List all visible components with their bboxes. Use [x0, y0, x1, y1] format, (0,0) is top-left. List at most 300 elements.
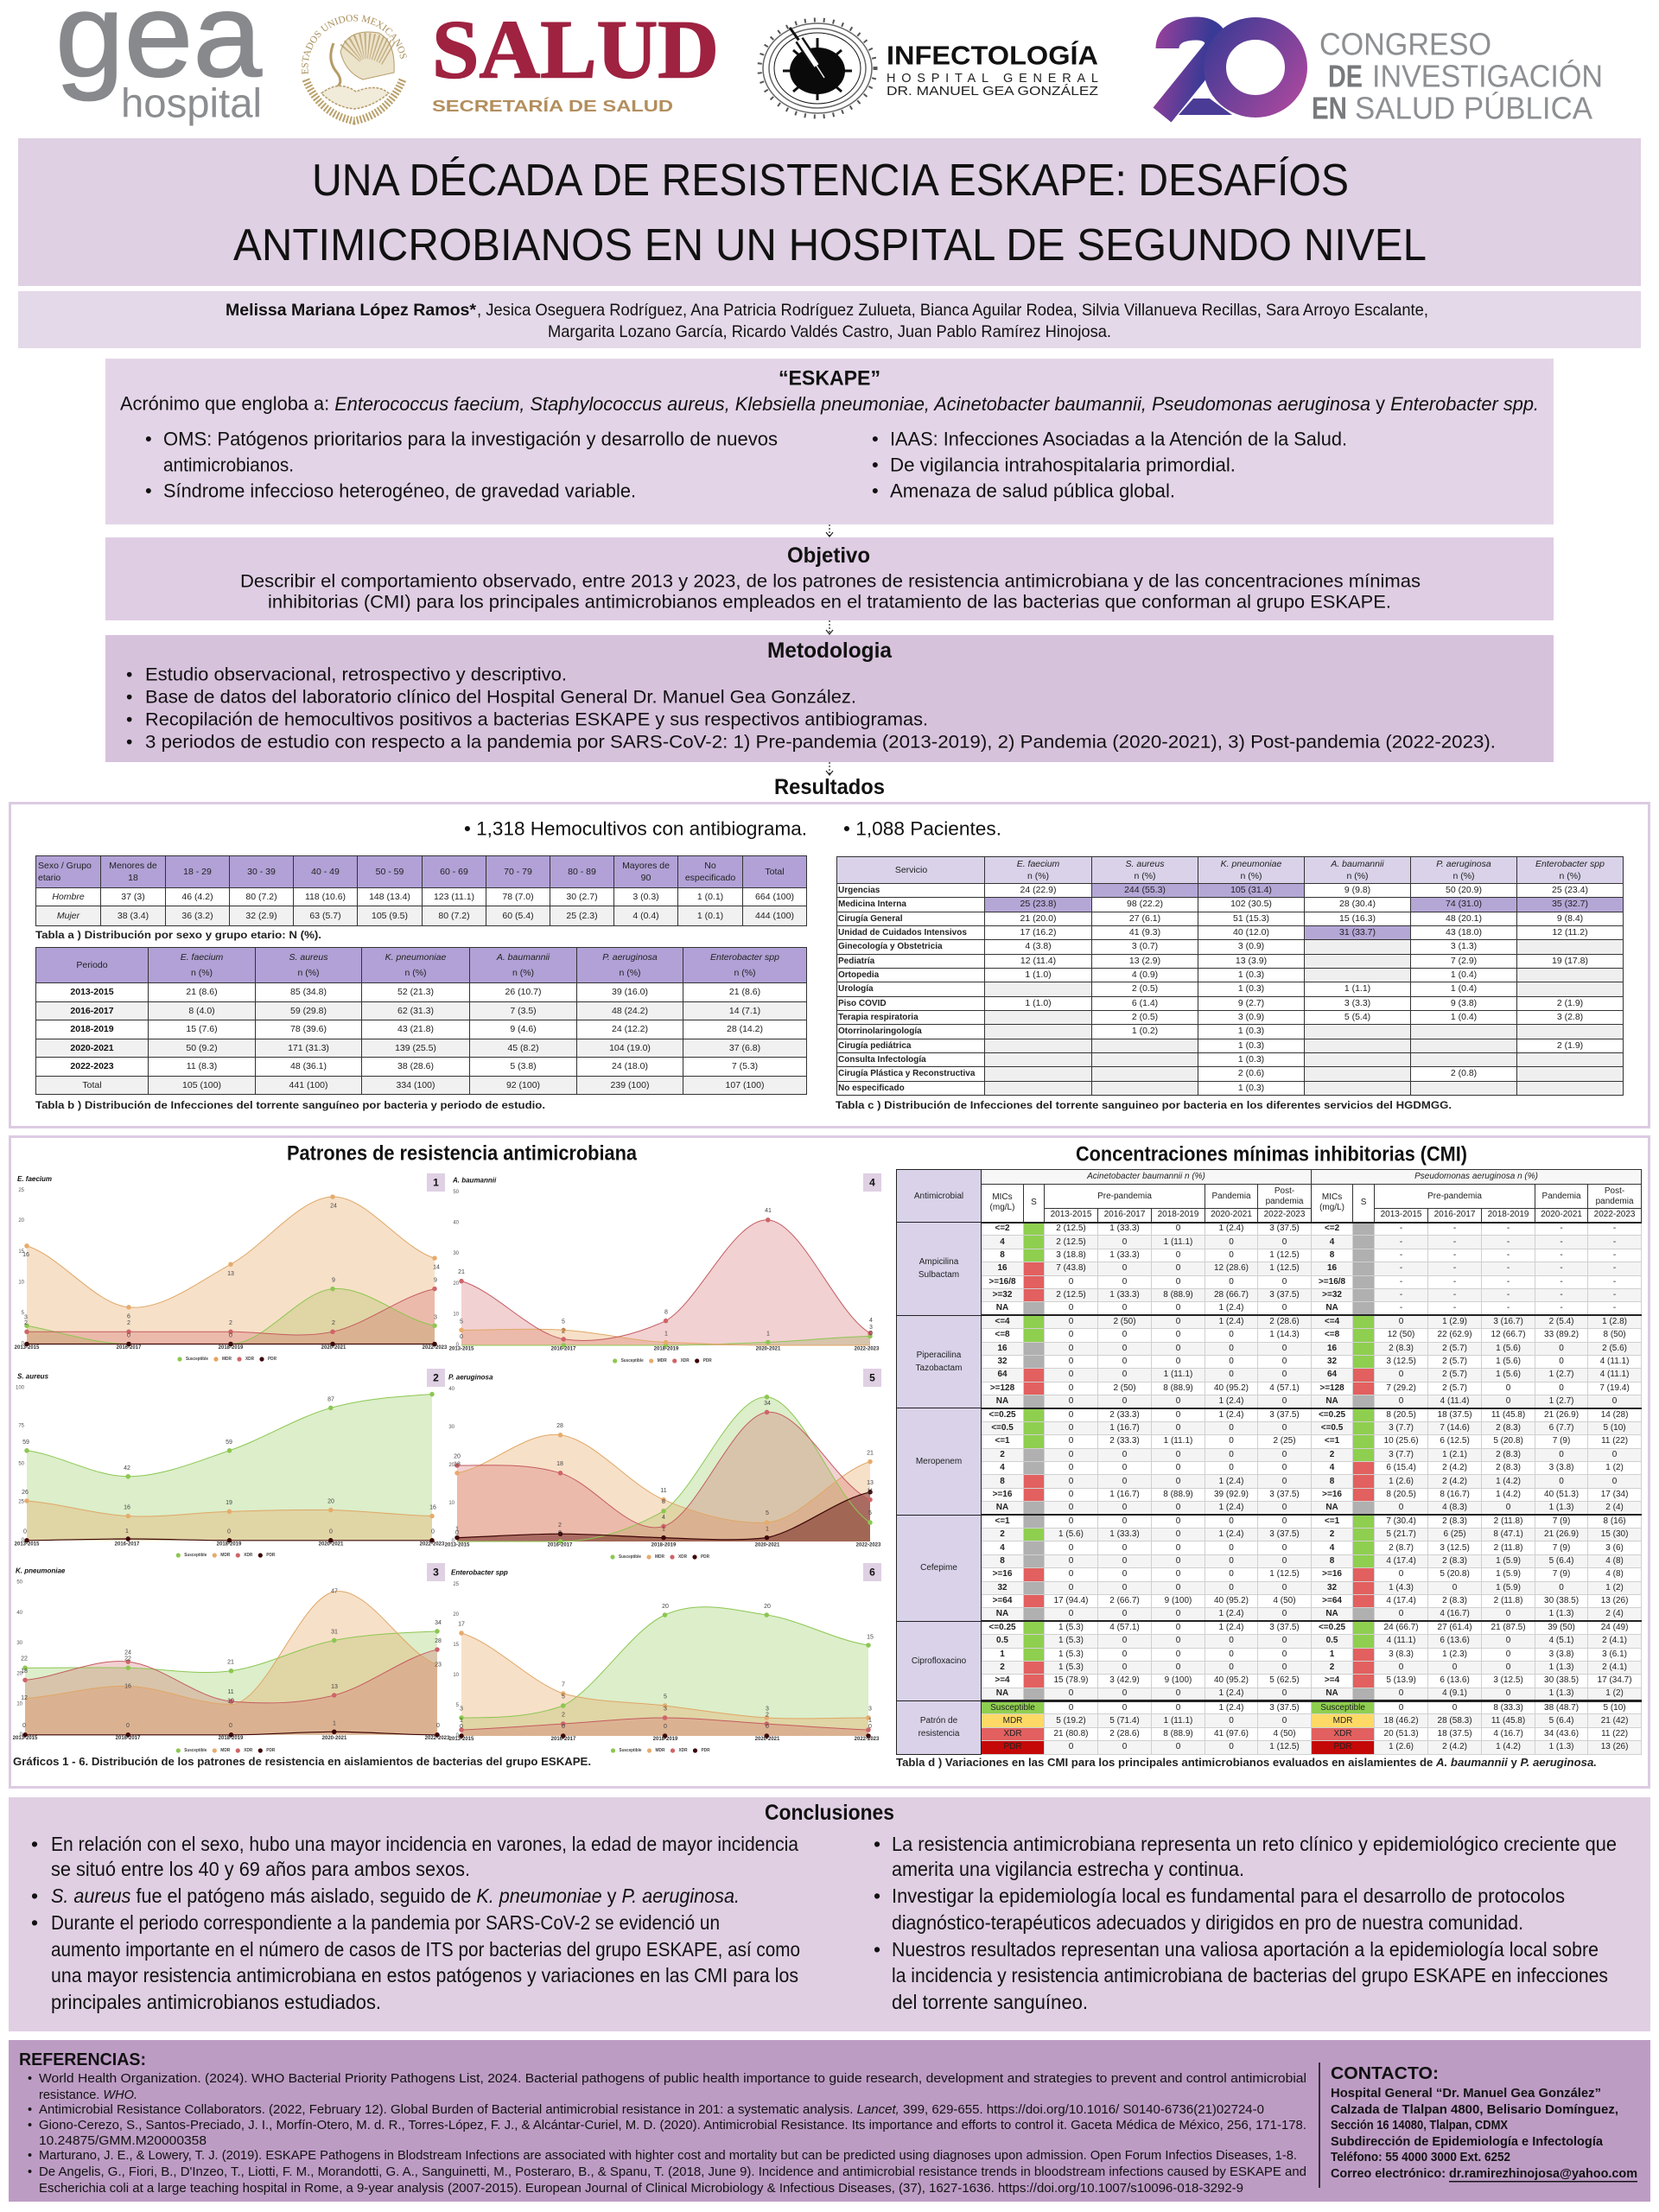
table d: concentraciones mínimas inhibitorias: - — [1613, 1237, 1616, 1247]
chart 2: S. aureus: XDR — [244, 1553, 252, 1558]
chart 3: K. pneumoniae — [13, 1563, 450, 1753]
table d: concentraciones mínimas inhibitorias: 2 (66.7) — [1109, 1596, 1140, 1605]
table d: concentraciones mínimas inhibitorias: 0 — [1282, 1450, 1287, 1459]
logo: escudo nacional: ESTADOS UNIDOS MEXICANOS — [301, 14, 407, 74]
logo: infectología — [760, 20, 1098, 117]
table d: concentraciones mínimas inhibitorias: 0 — [1176, 1662, 1180, 1672]
table d: concentraciones mínimas inhibitorias: 28 (66.7) — [1214, 1290, 1249, 1300]
table d: concentraciones mínimas inhibitorias: 0 — [1506, 1383, 1510, 1393]
table d: concentraciones mínimas inhibitorias: 3 (8.3) — [1389, 1649, 1414, 1659]
table d: concentraciones mínimas inhibitorias: 0 — [1176, 1636, 1180, 1645]
chart 1: E. faecium: 15 — [18, 1249, 25, 1255]
table d: concentraciones mínimas inhibitorias: Meropenem — [916, 1457, 962, 1466]
table d: concentraciones mínimas inhibitorias: 7 (30.4) — [1386, 1516, 1416, 1526]
table d: concentraciones mínimas inhibitorias: 0 — [1229, 1569, 1234, 1579]
chart 3: K. pneumoniae: PDR — [266, 1748, 275, 1753]
table d: concentraciones mínimas inhibitorias: 1 (2.4) — [1219, 1503, 1243, 1512]
table d: concentraciones mínimas inhibitorias: 0 — [1069, 1556, 1073, 1566]
table a: sexo y grupo etario: 1 (0.1) — [697, 892, 723, 902]
table d: concentraciones mínimas inhibitorias: 0 — [1282, 1516, 1287, 1526]
panel: Referencias: • — [28, 2149, 32, 2163]
table d: concentraciones mínimas inhibitorias: 2 — [1000, 1662, 1005, 1672]
table c: servicios: 19 (17.8) — [1552, 956, 1588, 966]
table d: concentraciones mínimas inhibitorias: 2 (33.3) — [1109, 1436, 1140, 1446]
table d: concentraciones mínimas inhibitorias: 0 — [1282, 1344, 1287, 1353]
table d: concentraciones mínimas inhibitorias: - — [1507, 1290, 1510, 1300]
table c: servicios: n (%) — [1559, 871, 1581, 881]
chart 1: E. faecium: 3 — [24, 1314, 28, 1320]
table a: sexo y grupo etario: 50 - 59 — [376, 866, 404, 876]
table c: servicios: 3 (0.9) — [1238, 941, 1264, 951]
chart 2: S. aureus: 2018-2019 — [217, 1541, 242, 1547]
chart 4: A. baumannii: Susceptible — [621, 1358, 644, 1363]
table c: servicios: 1 (1.1) — [1344, 983, 1370, 994]
chart 6: Enterobacter spp: 1 — [460, 1718, 463, 1724]
table d: concentraciones mínimas inhibitorias: - — [1507, 1277, 1510, 1287]
chart 5: P. aeruginosa: 30 — [448, 1425, 455, 1430]
table d: concentraciones mínimas inhibitorias: 0 — [1229, 1450, 1234, 1459]
chart 3: K. pneumoniae: 18 — [21, 1669, 28, 1675]
chart 2: S. aureus: 16 — [124, 1505, 130, 1511]
table d: concentraciones mínimas inhibitorias: pandemia — [1596, 1196, 1634, 1206]
chart 3: K. pneumoniae: 24 — [124, 1650, 131, 1656]
chart 3: K. pneumoniae: 47 — [331, 1588, 338, 1595]
table d: concentraciones mínimas inhibitorias: 1 (2.4) — [1219, 1688, 1243, 1698]
table d: concentraciones mínimas inhibitorias: 0 — [1559, 1383, 1564, 1393]
contacto: dr.ramirezhinojosa@yahoo.com — [1449, 2167, 1637, 2181]
table d: concentraciones mínimas inhibitorias: 0 — [1506, 1662, 1510, 1672]
table d: concentraciones mínimas inhibitorias: - — [1453, 1277, 1456, 1287]
chart 1: E. faecium: PDR — [268, 1357, 276, 1362]
panel: Objetivo: Describir el comportamiento observado, entre 2013 y 2023, de los patrones de resistencia antimicrobiana y de las concentraciones mínimas — [240, 572, 1421, 591]
panel: Referencias: De Angelis, G., Fiori, B., D'Inzeo, T., Liotti, F. M., Morandotti, G. A., Sanguinetti, M., Posteraro, B., & Spanu, T. (2018, June 9). Incidence and antimicrobial resistance trends in bloodstream infections caused by ESKAPE and — [39, 2165, 1306, 2179]
chart 3: K. pneumoniae: 40 — [16, 1611, 23, 1616]
panel: Conclusiones: S. aureus fue el patógeno más aislado, seguido de K. pneumoniae y P. aeruginosa. — [51, 1885, 740, 1907]
table d: concentraciones mínimas inhibitorias: 0 — [1122, 1357, 1127, 1366]
panel: Metodología: Base de datos del laboratorio clínico del Hospital General Dr. Manuel Gea González. — [145, 688, 856, 707]
table d: concentraciones mínimas inhibitorias: - — [1560, 1290, 1563, 1300]
table c: servicios: 13 (3.9) — [1236, 956, 1267, 966]
table d: concentraciones mínimas inhibitorias: 39 (50) — [1548, 1623, 1575, 1632]
chart 2: S. aureus: 42 — [124, 1465, 130, 1471]
table b: bacteria y periodo: 52 (21.3) — [397, 987, 434, 997]
table d: concentraciones mínimas inhibitorias: 5 (6.4) — [1549, 1556, 1574, 1566]
table d: concentraciones mínimas inhibitorias: Acinetobacter baumannii n (%) — [1087, 1172, 1205, 1181]
stat: pacientes: • 1,088 Pacientes. — [843, 817, 1001, 840]
panel: Referencias: Marturano, J. E., & Lowery, T. J. (2019). ESKAPE Pathogens in Blodstream Infections are associated with highter cost and mortality but can be predicted using diagnoses upon admission. Open Forum Infectios Diseases, 1-8. — [39, 2149, 1297, 2163]
chart 1: E. faecium: 25 — [18, 1188, 25, 1193]
table d: concentraciones mínimas inhibitorias: 1 (5.9) — [1496, 1569, 1521, 1579]
table d: concentraciones mínimas inhibitorias: 3 (37.5) — [1269, 1410, 1300, 1420]
table d: concentraciones mínimas inhibitorias: - — [1613, 1290, 1616, 1300]
chart 2: S. aureus: 2013-2015 — [15, 1541, 40, 1547]
chart 2: S. aureus: 87 — [327, 1396, 334, 1402]
table d: concentraciones mínimas inhibitorias: 0 — [1176, 1556, 1180, 1566]
table d: concentraciones mínimas inhibitorias: 1 (33.3) — [1109, 1250, 1140, 1260]
table b: bacteria y periodo: n (%) — [512, 968, 534, 978]
contacto: Teléfono: 55 4000 3000 Ext. 6252 — [1331, 2151, 1510, 2164]
table d: concentraciones mínimas inhibitorias: Pandemia — [1542, 1191, 1581, 1201]
table d: concentraciones mínimas inhibitorias: >=128 — [1319, 1383, 1344, 1393]
table d: concentraciones mínimas inhibitorias: Pre-pandemia — [1097, 1191, 1152, 1201]
table b: bacteria y periodo: 37 (6.8) — [729, 1043, 760, 1053]
table d: concentraciones mínimas inhibitorias: 2 (4) — [1605, 1609, 1624, 1618]
table d: concentraciones mínimas inhibitorias: 4 (5.1) — [1549, 1636, 1574, 1645]
chart 2: S. aureus: 0 — [23, 1529, 27, 1535]
table d: concentraciones mínimas inhibitorias: 1 (2.4) — [1219, 1317, 1243, 1326]
table d: concentraciones mínimas inhibitorias: 4 (50) — [1273, 1729, 1296, 1738]
table d: concentraciones mínimas inhibitorias: 5 (20.8) — [1440, 1569, 1470, 1579]
table d: concentraciones mínimas inhibitorias: 0 — [1122, 1583, 1127, 1592]
chart 5: P. aeruginosa: 2022-2023 — [856, 1542, 881, 1548]
table d: concentraciones mínimas inhibitorias: 5 (10) — [1604, 1703, 1626, 1713]
panel: Objetivo: Objetivo — [787, 543, 870, 568]
table d: concentraciones mínimas inhibitorias: 0 — [1452, 1662, 1457, 1672]
table d: concentraciones mínimas inhibitorias: - — [1560, 1303, 1563, 1313]
table d: concentraciones mínimas inhibitorias: - — [1613, 1263, 1616, 1273]
table d: concentraciones mínimas inhibitorias: 21 (26.9) — [1544, 1410, 1579, 1420]
table d: concentraciones mínimas inhibitorias: 8 — [1330, 1477, 1334, 1486]
table d: concentraciones mínimas inhibitorias: 0 — [1229, 1556, 1234, 1566]
table a: sexo y grupo etario: 46 (4.2) — [181, 892, 213, 902]
table d: concentraciones mínimas inhibitorias: 0 — [1399, 1569, 1403, 1579]
table d: concentraciones mínimas inhibitorias: 2 (12.5) — [1056, 1224, 1086, 1233]
chart 6: Enterobacter spp: 6 — [869, 1566, 875, 1578]
chart 6: Enterobacter spp: Enterobacter spp — [451, 1569, 508, 1576]
chart 4: A. baumannii: PDR — [703, 1358, 712, 1363]
table d: concentraciones mínimas inhibitorias: 0 — [1176, 1303, 1180, 1313]
chart 3: K. pneumoniae: 2016-2017 — [116, 1736, 141, 1741]
table d: concentraciones mínimas inhibitorias: 1 (11.1) — [1164, 1237, 1192, 1247]
table d: concentraciones mínimas inhibitorias: 0 — [1122, 1703, 1127, 1713]
chart 5: P. aeruginosa: 4 — [662, 1515, 665, 1521]
table d: concentraciones mínimas inhibitorias: 0 — [1229, 1583, 1234, 1592]
chart 4: A. baumannii: 40 — [453, 1220, 460, 1225]
table d: concentraciones mínimas inhibitorias: 15 (30) — [1601, 1529, 1628, 1539]
table d: concentraciones mínimas inhibitorias: 4 (17.4) — [1386, 1556, 1416, 1566]
table d: concentraciones mínimas inhibitorias: 2 (25) — [1273, 1436, 1296, 1446]
table d: concentraciones mínimas inhibitorias: 0 — [1559, 1357, 1564, 1366]
chart 1: E. faecium: 5 — [22, 1311, 25, 1316]
table d: concentraciones mínimas inhibitorias: - — [1613, 1224, 1616, 1233]
table d: concentraciones mínimas inhibitorias: 4 — [1330, 1463, 1334, 1472]
table d: concentraciones mínimas inhibitorias: 1 (2.1) — [1442, 1450, 1467, 1459]
table d: concentraciones mínimas inhibitorias: 1 (14.3) — [1269, 1330, 1300, 1339]
table c: servicios: 1 (1.0) — [1025, 969, 1052, 980]
table d: concentraciones mínimas inhibitorias: 1 (5.3) — [1058, 1662, 1084, 1672]
chart 5: P. aeruginosa: 0 — [558, 1530, 562, 1536]
table d: concentraciones mínimas inhibitorias: <=1 — [995, 1516, 1010, 1526]
table b: bacteria y periodo: Enterobacter spp — [710, 952, 779, 963]
table c: servicios: 1 (0.4) — [1451, 1012, 1477, 1022]
table d: concentraciones mínimas inhibitorias: 0 — [1282, 1396, 1287, 1406]
table b: bacteria y periodo: 26 (10.7) — [505, 987, 542, 997]
chart 5: P. aeruginosa: 40 — [448, 1387, 455, 1392]
table d: concentraciones mínimas inhibitorias: 0 — [1176, 1477, 1180, 1486]
table d: concentraciones mínimas inhibitorias: >=32 — [993, 1290, 1012, 1300]
table d: concentraciones mínimas inhibitorias: 3 (7.7) — [1389, 1423, 1414, 1433]
table c: servicios: 43 (18.0) — [1446, 927, 1482, 938]
table b: bacteria y periodo: P. aeruginosa — [602, 952, 658, 963]
table d: concentraciones mínimas inhibitorias: (mg/L) — [990, 1203, 1014, 1212]
panel: Conclusiones: del torrente sanguíneo. — [892, 1991, 1088, 2013]
table d: concentraciones mínimas inhibitorias: 0 — [1282, 1583, 1287, 1592]
chart 5: P. aeruginosa: 10 — [448, 1501, 455, 1506]
chart 6: Enterobacter spp: 0 — [868, 1724, 872, 1730]
heading: Resultados: Resultados — [774, 775, 885, 799]
table d: concentraciones mínimas inhibitorias: 0 — [1069, 1477, 1073, 1486]
table d: concentraciones mínimas inhibitorias: 0 — [1069, 1344, 1073, 1353]
table c: servicios: Unidad de Cuidados Intensivos — [838, 928, 967, 938]
panel: ESKAPE: • — [872, 454, 879, 475]
table d: concentraciones mínimas inhibitorias: 0 — [1122, 1330, 1127, 1339]
table d: concentraciones mínimas inhibitorias: 5 (13.9) — [1386, 1675, 1416, 1685]
panel: Metodología: • — [126, 665, 132, 684]
table d: concentraciones mínimas inhibitorias: 2 (50) — [1113, 1317, 1136, 1326]
chart 5: P. aeruginosa: 20 — [454, 1453, 461, 1460]
table d: concentraciones mínimas inhibitorias: 1 — [1000, 1649, 1005, 1659]
table d: concentraciones mínimas inhibitorias: 0 — [1506, 1688, 1510, 1698]
chart 3: K. pneumoniae: 2018-2019 — [219, 1736, 244, 1741]
table d: concentraciones mínimas inhibitorias: 0 — [1399, 1370, 1403, 1379]
chart 1: E. faecium: 0 — [229, 1332, 232, 1338]
chart 2: S. aureus: 1 — [125, 1529, 129, 1535]
table c: servicios: 9 (3.8) — [1451, 998, 1477, 1008]
table b: bacteria y periodo: 50 (9.2) — [186, 1043, 218, 1053]
table a: sexo y grupo etario: 37 (3) — [121, 892, 145, 902]
table c: servicios: 105 (31.4) — [1230, 885, 1272, 895]
panel: Metodología: Recopilación de hemocultivos positivos a bacterias ESKAPE y sus respectivos antibiogramas. — [145, 710, 928, 729]
table d: concentraciones mínimas inhibitorias: 21 (80.8) — [1053, 1729, 1089, 1738]
table d: concentraciones mínimas inhibitorias: 0 — [1282, 1503, 1287, 1512]
table d: concentraciones mínimas inhibitorias: 2 (8.3) — [1442, 1596, 1467, 1605]
panel: Referencias — [9, 2040, 1650, 2202]
table d: concentraciones mínimas inhibitorias: 2 (4.1) — [1602, 1636, 1627, 1645]
table d: concentraciones mínimas inhibitorias: >=16 — [993, 1490, 1012, 1499]
table a: sexo y grupo etario: 4 (0.4) — [632, 911, 659, 921]
caption: tabla a: Tabla a ) Distribución por sexo y grupo etario: N (%). — [35, 929, 321, 941]
panel: Conclusiones: se situó entre los 40 y 69 años para ambos sexos. — [51, 1858, 470, 1880]
panel: Conclusiones: • — [31, 1885, 38, 1907]
table d: concentraciones mínimas inhibitorias: 21 (42) — [1601, 1716, 1628, 1726]
table d: concentraciones mínimas inhibitorias: Post- — [1605, 1185, 1624, 1196]
table d: concentraciones mínimas inhibitorias: 1 (12.5) — [1269, 1742, 1300, 1751]
table d: concentraciones mínimas inhibitorias: 64 — [1327, 1370, 1337, 1379]
panel: Metodología: • — [126, 733, 132, 752]
table d: concentraciones mínimas inhibitorias: Patrón de — [920, 1716, 957, 1726]
contacto: Sección 16 14080, Tlalpan, CDMX — [1331, 2119, 1508, 2133]
table d: concentraciones mínimas inhibitorias: 0 — [1282, 1688, 1287, 1698]
table d: concentraciones mínimas inhibitorias: - — [1453, 1303, 1456, 1313]
chart 2: S. aureus: 25 — [18, 1500, 25, 1505]
panel: Conclusiones: La resistencia antimicrobiana representa un reto clínico y epidemiológico creciente que — [892, 1833, 1617, 1855]
chart 3: K. pneumoniae: 3 — [433, 1566, 439, 1578]
panel: Conclusiones: Conclusiones — [765, 1801, 894, 1825]
chart 3: K. pneumoniae: 12 — [21, 1695, 28, 1701]
table d: concentraciones mínimas inhibitorias: 0 — [1122, 1636, 1127, 1645]
table d: concentraciones mínimas inhibitorias: 0 — [1229, 1463, 1234, 1472]
table d: concentraciones mínimas inhibitorias: >=16 — [1322, 1569, 1342, 1579]
table b: bacteria y periodo: A. baumannii — [497, 952, 550, 963]
table d: concentraciones mínimas inhibitorias: - — [1453, 1237, 1456, 1247]
panel: Referencias: Antimicrobial Resistance Collaborators. (2022, February 12). Global Burden of Bacterial antimicrobial resistance in 201: a systematic analysis. Lancet, 399, 629-655. https://doi.org/10.1016/ S0140-6736(21)02724-0 — [39, 2103, 1264, 2117]
panel: Conclusiones: Nuestros resultados representan una valiosa aportación a la epidemiología local sobre — [892, 1938, 1599, 1961]
table d: concentraciones mínimas inhibitorias: 2 (5.7) — [1442, 1357, 1467, 1366]
chart 6: Enterobacter spp — [449, 1563, 881, 1753]
table a: sexo y grupo etario: especificado — [685, 873, 735, 883]
table d: concentraciones mínimas inhibitorias: 2 — [1330, 1450, 1334, 1459]
table d: concentraciones mínimas inhibitorias: 16 — [1327, 1344, 1337, 1353]
table b: bacteria y periodo: 139 (25.5) — [395, 1043, 436, 1053]
table d: concentraciones mínimas inhibitorias: 0 — [1282, 1277, 1287, 1287]
table d: concentraciones mínimas inhibitorias: >=16 — [993, 1569, 1012, 1579]
table d: concentraciones mínimas inhibitorias: 1 (2.6) — [1389, 1477, 1414, 1486]
table d: concentraciones mínimas inhibitorias: 0 — [1122, 1556, 1127, 1566]
chart 6: Enterobacter spp: 20 — [764, 1604, 771, 1610]
table d: concentraciones mínimas inhibitorias: 0 — [1282, 1237, 1287, 1247]
table d: concentraciones mínimas inhibitorias: 8 — [1000, 1556, 1005, 1566]
chart 5: P. aeruginosa: 2018-2019 — [652, 1542, 677, 1548]
chart 1: E. faecium: 9 — [332, 1277, 335, 1284]
table b: bacteria y periodo: Total — [82, 1080, 102, 1090]
chart 1: E. faecium: XDR — [245, 1357, 254, 1362]
table c: servicios: 1 (0.3) — [1238, 1040, 1264, 1051]
table d: concentraciones mínimas inhibitorias: NA — [996, 1688, 1008, 1698]
chart 5: P. aeruginosa: 5 — [766, 1510, 769, 1516]
chart 3: K. pneumoniae: 30 — [16, 1641, 23, 1646]
contacto: Hospital General “Dr. Manuel Gea González” — [1331, 2087, 1601, 2101]
table d: concentraciones mínimas inhibitorias: (mg/L) — [1319, 1203, 1344, 1212]
chart 6: Enterobacter spp: 2 — [766, 1712, 769, 1718]
chart 2: S. aureus: 2020-2021 — [319, 1541, 344, 1547]
table b: bacteria y periodo — [35, 947, 807, 1095]
table d: concentraciones mínimas inhibitorias: 3 (12.5) — [1440, 1543, 1470, 1553]
table d: concentraciones mínimas inhibitorias: 2 (4) — [1605, 1503, 1624, 1512]
table d: concentraciones mínimas inhibitorias: <=0.25 — [1319, 1410, 1345, 1420]
table d: concentraciones mínimas inhibitorias: 8 — [1330, 1556, 1334, 1566]
table d: concentraciones mínimas inhibitorias: 0 — [1229, 1742, 1234, 1751]
chart 6: Enterobacter spp: 3 — [868, 1706, 872, 1713]
table a: sexo y grupo etario: 3 (0.3) — [632, 892, 659, 902]
table c: servicios: 17 (16.2) — [1020, 927, 1057, 938]
chart 5: P. aeruginosa: Susceptible — [619, 1554, 641, 1560]
table d: concentraciones mínimas inhibitorias: 1 (11.1) — [1164, 1436, 1192, 1446]
table d: concentraciones mínimas inhibitorias: 17 (94.4) — [1053, 1596, 1089, 1605]
table d: concentraciones mínimas inhibitorias: >=16/8 — [988, 1277, 1016, 1287]
table d: concentraciones mínimas inhibitorias: 0 — [1069, 1583, 1073, 1592]
table d: concentraciones mínimas inhibitorias: 0 — [1229, 1636, 1234, 1645]
table d: concentraciones mínimas inhibitorias: - — [1507, 1237, 1510, 1247]
table d: concentraciones mínimas inhibitorias: 3 (3.8) — [1549, 1649, 1574, 1659]
chart 5: P. aeruginosa: 11 — [660, 1488, 667, 1494]
table a: sexo y grupo etario: 40 - 49 — [311, 866, 340, 876]
table c: servicios: 1 (0.3) — [1238, 1026, 1264, 1036]
table b: bacteria y periodo: 92 (100) — [506, 1080, 540, 1090]
table d: concentraciones mínimas inhibitorias: 1 (2.4) — [1219, 1529, 1243, 1539]
ESKAPE heading: “ESKAPE” — [779, 366, 880, 391]
table d: concentraciones mínimas inhibitorias: 0 — [1176, 1529, 1180, 1539]
table b: bacteria y periodo: 28 (14.2) — [727, 1024, 763, 1034]
table c: servicios: 1 (0.3) — [1238, 983, 1264, 994]
table b: bacteria y periodo: 8 (4.0) — [188, 1006, 215, 1016]
table b: bacteria y periodo: 2020-2021 — [70, 1043, 114, 1053]
table d: concentraciones mínimas inhibitorias: 0 — [1122, 1649, 1127, 1659]
chart 3: K. pneumoniae: 10 — [16, 1702, 23, 1707]
table a: sexo y grupo etario: 123 (11.1) — [434, 892, 474, 902]
panel: Conclusiones: amerita una vigilancia estrecha y continua. — [892, 1858, 1244, 1880]
table a: sexo y grupo etario: Mayores de — [622, 861, 670, 871]
table a: sexo y grupo etario: 63 (5.7) — [309, 911, 341, 921]
table d: concentraciones mínimas inhibitorias: >=4 — [995, 1675, 1010, 1685]
table d: concentraciones mínimas inhibitorias: 5 (71.4) — [1109, 1716, 1140, 1726]
table d: concentraciones mínimas inhibitorias: <=0.25 — [988, 1623, 1016, 1632]
table d: concentraciones mínimas inhibitorias: 9 (100) — [1165, 1596, 1192, 1605]
chart 5: P. aeruginosa: MDR — [655, 1554, 664, 1560]
table d: concentraciones mínimas inhibitorias: - — [1560, 1224, 1563, 1233]
table d: concentraciones mínimas inhibitorias: 7 (9) — [1553, 1543, 1570, 1553]
table d: concentraciones mínimas inhibitorias: 0 — [1506, 1609, 1510, 1618]
table a: sexo y grupo etario: 18 — [128, 873, 138, 883]
table c: servicios: 4 (0.9) — [1132, 969, 1158, 980]
chart 2: S. aureus: 50 — [18, 1462, 25, 1467]
panel: Objetivo: inhibitorias (CMI) para los principales antimicrobianos empleados en el tratamiento de las bacterias que conforman al grupo ESKAPE. — [268, 593, 1391, 612]
table d: concentraciones mínimas inhibitorias: Ampicilina — [919, 1257, 958, 1267]
table d: concentraciones mínimas inhibitorias: 0 — [1122, 1277, 1127, 1287]
table d: concentraciones mínimas inhibitorias: 4 (16.7) — [1493, 1729, 1523, 1738]
table d: concentraciones mínimas inhibitorias: 0 — [1069, 1688, 1073, 1698]
table d: concentraciones mínimas inhibitorias: 0 — [1176, 1688, 1180, 1698]
table d: concentraciones mínimas inhibitorias: 0 — [1229, 1516, 1234, 1526]
panel: Referencias: resistance. WHO. — [39, 2088, 137, 2102]
table d: concentraciones mínimas inhibitorias: 0 — [1122, 1463, 1127, 1472]
table d: concentraciones mínimas inhibitorias: 3 (37.5) — [1269, 1529, 1300, 1539]
panel: resultados frame — [10, 804, 1649, 1127]
table d: concentraciones mínimas inhibitorias: 0 — [1282, 1556, 1287, 1566]
table c: servicios — [836, 856, 1624, 1096]
table d: concentraciones mínimas inhibitorias: - — [1507, 1263, 1510, 1273]
table d: concentraciones mínimas inhibitorias: 0 — [1069, 1317, 1073, 1326]
table d: concentraciones mínimas inhibitorias: 0 — [1176, 1649, 1180, 1659]
table d: concentraciones mínimas inhibitorias: 2 (8.3) — [1442, 1516, 1467, 1526]
table d: concentraciones mínimas inhibitorias: 1 (11.1) — [1164, 1716, 1192, 1726]
table d: concentraciones mínimas inhibitorias: PDR — [1003, 1742, 1022, 1751]
chart 2: S. aureus: 2 — [433, 1372, 439, 1384]
table d: concentraciones mínimas inhibitorias: 2 (4.2) — [1442, 1742, 1467, 1751]
table d: concentraciones mínimas inhibitorias: 4 (57.1) — [1109, 1623, 1140, 1632]
table c: servicios: Ortopedia — [838, 970, 879, 980]
chart 1: E. faecium: 3 — [434, 1314, 437, 1320]
table d: concentraciones mínimas inhibitorias: 1 (5.6) — [1496, 1344, 1521, 1353]
table d: concentraciones mínimas inhibitorias: 6 (13.6) — [1440, 1636, 1470, 1645]
table c: servicios: 51 (15.3) — [1233, 913, 1269, 924]
chart 4: A. baumannii: 2022-2023 — [855, 1346, 880, 1351]
chart 1: E. faecium — [15, 1173, 448, 1362]
table d: concentraciones mínimas inhibitorias: NA — [1325, 1609, 1338, 1618]
chart 2: S. aureus: PDR — [266, 1553, 275, 1558]
table d: concentraciones mínimas inhibitorias: 2 (5.7) — [1442, 1383, 1467, 1393]
table b: bacteria y periodo: 7 (5.3) — [732, 1061, 758, 1071]
table b: bacteria y periodo: 334 (100) — [397, 1080, 435, 1090]
table d: concentraciones mínimas inhibitorias: 3 (6.1) — [1602, 1649, 1627, 1659]
caption: gráficos: Gráficos 1 - 6. Distribución de los patrones de resistencia en aislamientos de bacterias del grupo ESKAPE. — [13, 1756, 591, 1768]
table d: concentraciones mínimas inhibitorias: 0 — [1176, 1609, 1180, 1618]
chart 6: Enterobacter spp: 1 — [868, 1718, 872, 1724]
table c: servicios: n (%) — [1027, 871, 1049, 881]
table a: sexo y grupo etario: Mujer — [57, 911, 79, 921]
chart 2: S. aureus: 16 — [429, 1505, 436, 1511]
table d: concentraciones mínimas inhibitorias: Antimicrobial — [914, 1191, 963, 1201]
contacto: Calzada de Tlalpan 4800, Belisario Domínguez, — [1331, 2103, 1618, 2117]
